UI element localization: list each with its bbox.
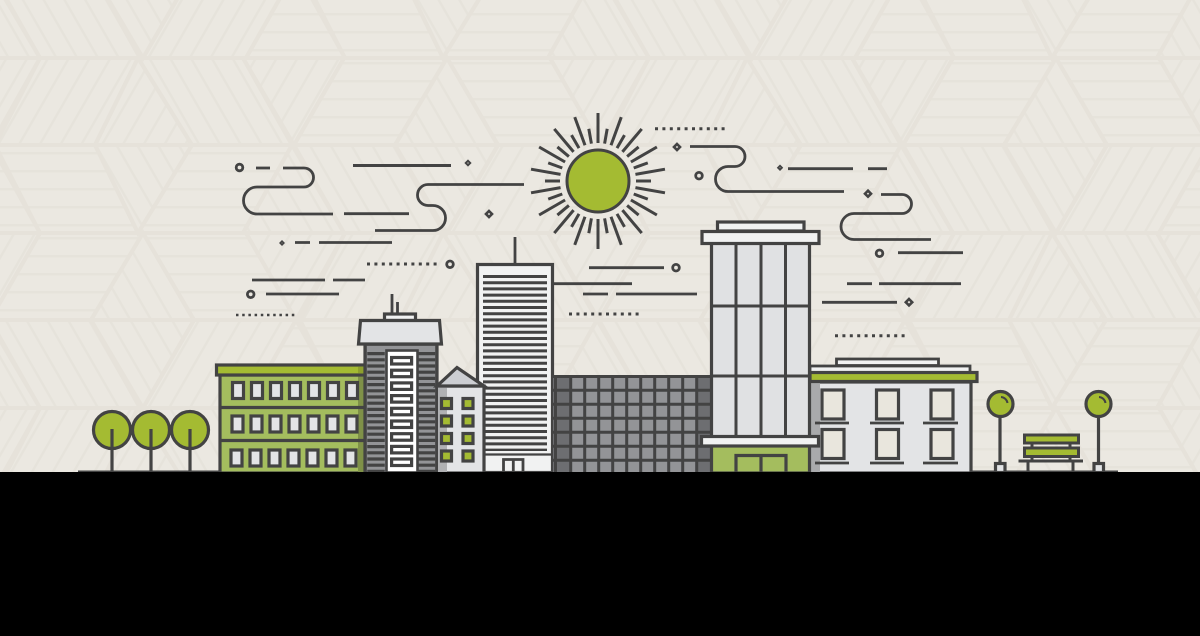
tower base xyxy=(712,445,810,473)
sun xyxy=(531,113,665,249)
white building right xyxy=(810,359,977,473)
tall white tower xyxy=(478,237,552,472)
entrance door xyxy=(736,456,786,472)
tower door xyxy=(504,460,523,472)
dark tower xyxy=(358,294,442,473)
small gabled house xyxy=(437,368,484,473)
wind lines: right xyxy=(655,129,963,336)
lamp post right xyxy=(1086,392,1111,472)
tree 2 xyxy=(132,412,170,472)
central white panel xyxy=(386,350,418,472)
windows xyxy=(822,390,953,458)
ground line xyxy=(78,470,1118,472)
windows row 1 xyxy=(232,382,358,398)
trees xyxy=(94,412,208,472)
sun disc xyxy=(567,150,629,212)
sun rays xyxy=(531,113,665,249)
side louvres xyxy=(376,352,426,472)
big glass tower xyxy=(702,222,819,473)
windows row 3 xyxy=(231,450,356,466)
facade lines xyxy=(483,275,547,451)
window sills xyxy=(815,423,958,463)
low grid building xyxy=(553,376,712,472)
black lower band xyxy=(0,472,1200,636)
house windows xyxy=(442,398,473,461)
green office building xyxy=(216,365,364,473)
park bench xyxy=(1018,435,1083,472)
wind lines: centre xyxy=(553,264,697,314)
windows row 2 xyxy=(232,416,357,432)
tree 3 xyxy=(172,412,208,472)
panel windows xyxy=(392,358,412,466)
tree 1 xyxy=(94,412,130,472)
wind lines: left xyxy=(236,161,524,315)
lamp post left xyxy=(988,392,1013,472)
